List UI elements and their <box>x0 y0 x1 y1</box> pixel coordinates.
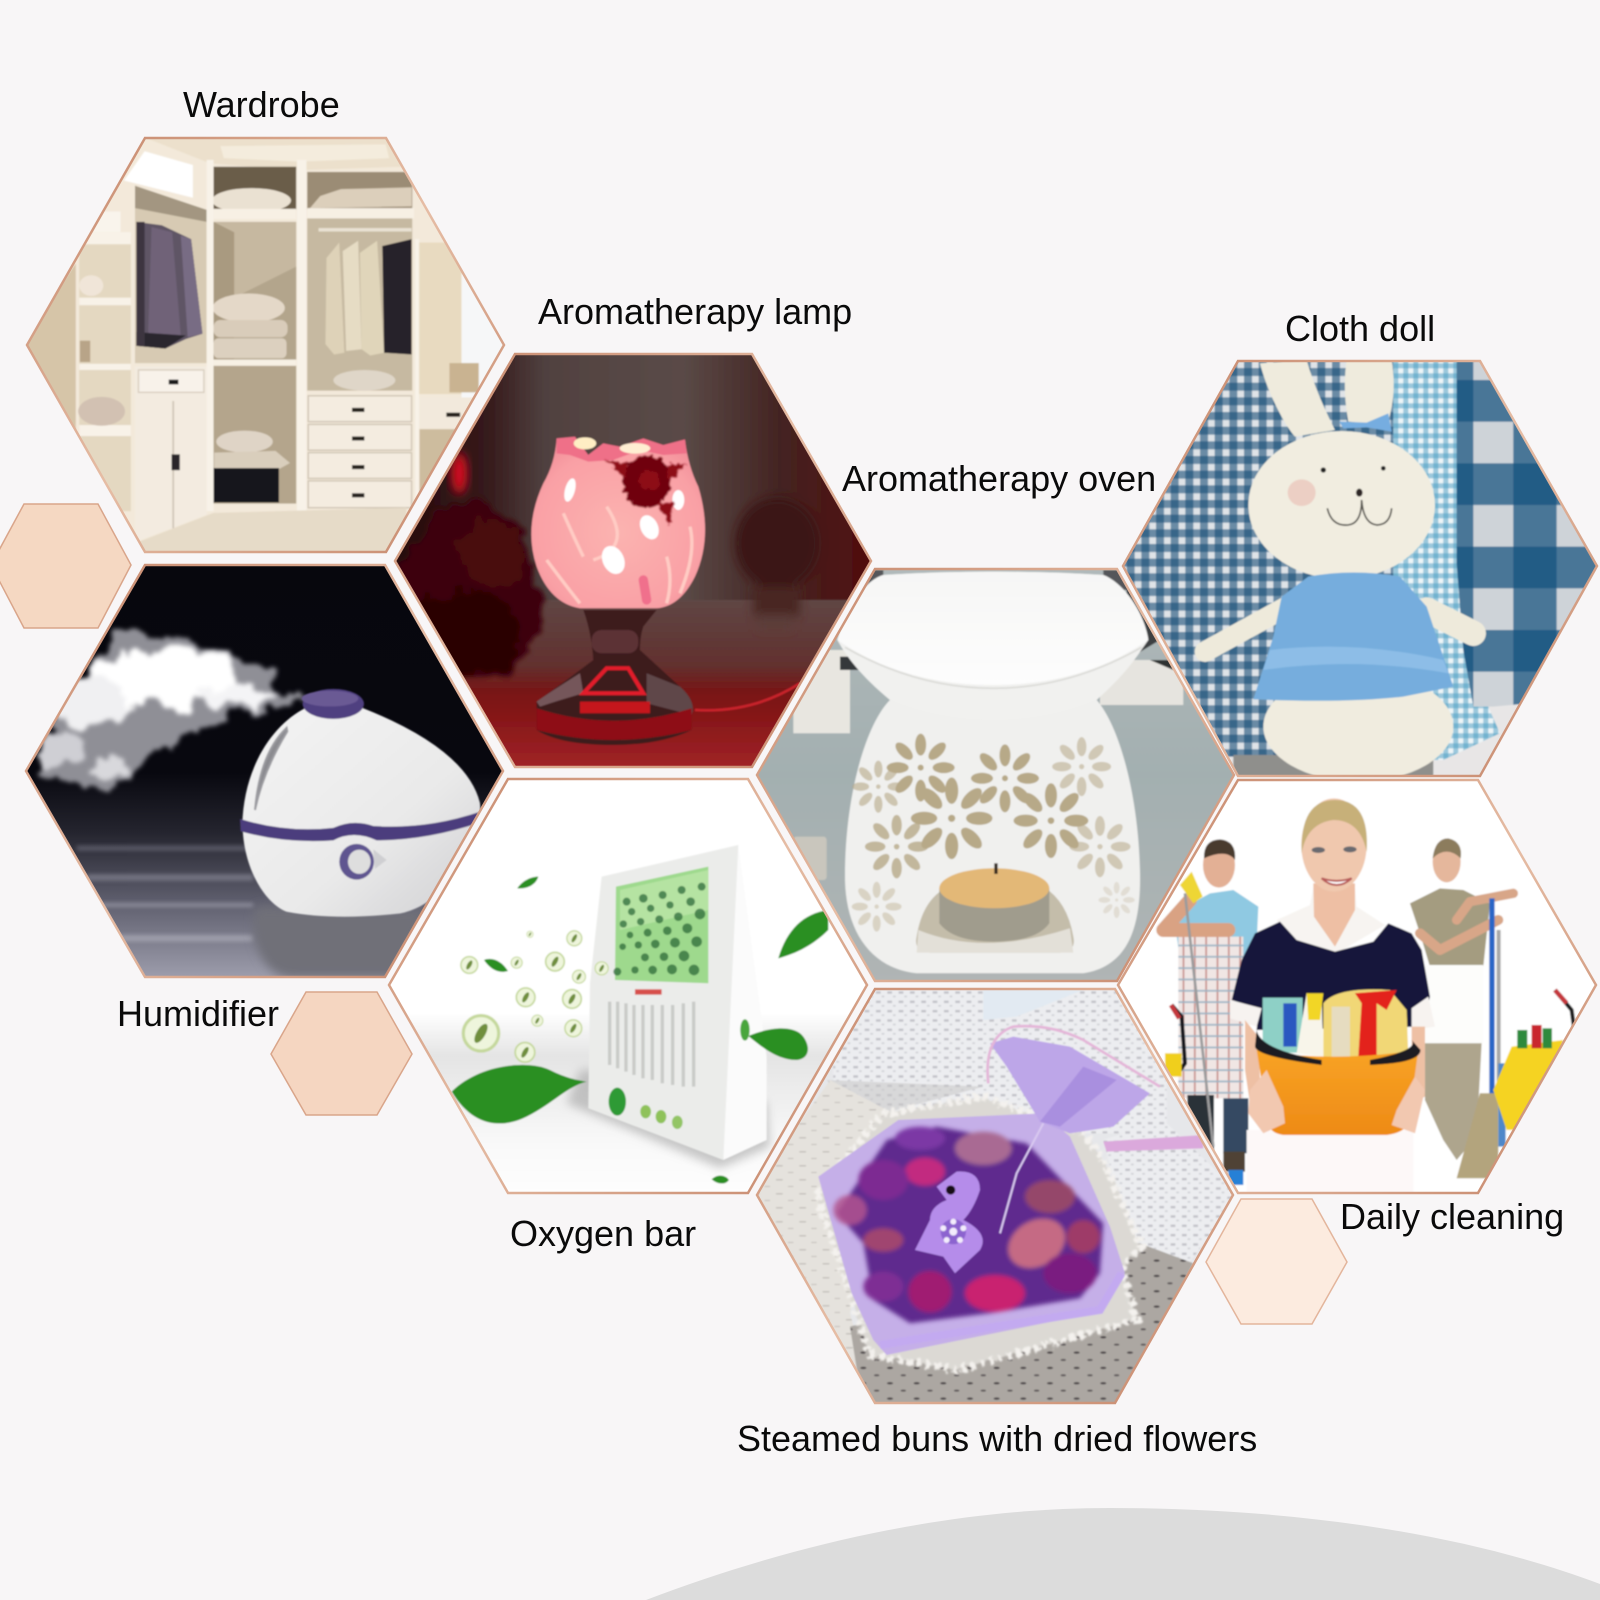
bunny face <box>1321 467 1326 473</box>
label: Daily cleaning: Daily cleaning <box>1340 1196 1564 1237</box>
small peach hexagon: left <box>0 504 131 628</box>
oil dish <box>836 570 1150 701</box>
decorative grey arc at bottom <box>646 1508 1600 1600</box>
label: Oxygen bar: Oxygen bar <box>510 1213 696 1254</box>
hexagon outline: cloth doll <box>1123 361 1597 776</box>
red bokeh <box>451 453 467 494</box>
purple flamingo charm <box>915 1172 983 1273</box>
label: Aromatherapy lamp: Aromatherapy lamp <box>538 291 852 332</box>
lamp shade <box>531 437 705 608</box>
posts <box>207 160 214 511</box>
rose ornament <box>605 456 688 525</box>
lace cushion <box>817 1097 1142 1370</box>
hexagon outline: daily cleaning <box>1118 780 1596 1193</box>
hexagon outline: wardrobe <box>27 138 504 552</box>
cleaning supplies <box>1263 989 1408 1057</box>
right column <box>297 160 307 511</box>
orange basket <box>1255 1030 1421 1135</box>
hexagon outline: sachet <box>757 989 1233 1403</box>
grille dots <box>613 883 706 976</box>
oxygen bubbles <box>461 931 608 1062</box>
humidifier body <box>240 689 480 917</box>
oxygen device <box>588 845 767 1160</box>
green leaves <box>452 877 828 1184</box>
burner body <box>845 700 1140 973</box>
panel: daily cleaning <box>1110 770 1600 1210</box>
organza bag <box>818 1026 1203 1355</box>
rolled paper <box>827 990 1240 1267</box>
woman in navy <box>1230 798 1435 1207</box>
blurred roses <box>398 503 542 683</box>
panel: steamed buns with dried flowers <box>750 980 1240 1410</box>
blurred silhouette <box>735 498 818 630</box>
hexagon outline: oxygen bar <box>389 779 867 1193</box>
bunny <box>1205 360 1473 782</box>
panel: cloth doll <box>1110 350 1600 782</box>
vent slots <box>608 1002 695 1087</box>
holding hands <box>1248 1070 1425 1133</box>
lamp base <box>537 610 800 745</box>
floor streaks <box>77 846 253 941</box>
panel: wardrobe <box>28 139 480 551</box>
device shadow <box>567 1070 770 1168</box>
reflection <box>250 909 413 976</box>
dark gingham pillow <box>1110 360 1397 757</box>
panel: humidifier <box>20 560 513 985</box>
hexagon outline: aromatherapy oven <box>757 569 1234 981</box>
label: Aromatherapy oven: Aromatherapy oven <box>842 458 1156 499</box>
panel: oxygen bar <box>391 780 865 1184</box>
hanging dark clothes <box>135 186 207 363</box>
yellow bucket <box>1493 990 1574 1130</box>
floor <box>140 508 406 551</box>
bunny dress <box>1253 572 1453 701</box>
small peach hexagon: right <box>1206 1199 1347 1324</box>
woman in khaki <box>1410 838 1513 1178</box>
linen cloth left <box>750 1080 893 1410</box>
large check pillow <box>1457 360 1600 707</box>
dried petals <box>833 1127 1103 1323</box>
controls <box>609 1088 626 1116</box>
panel: aromatherapy lamp <box>390 350 877 773</box>
label: Humidifier: Humidifier <box>117 993 279 1034</box>
label: Steamed buns with dried flowers: Steamed buns with dried flowers <box>737 1418 1257 1459</box>
white furniture <box>793 570 1183 733</box>
crown moulding <box>151 140 400 170</box>
far left cabinet <box>28 264 76 428</box>
hexagon outline: humidifier <box>26 565 503 977</box>
label: Cloth doll: Cloth doll <box>1285 308 1435 349</box>
cut-out flowers <box>852 734 1135 932</box>
right drawers <box>308 396 412 508</box>
man with apron <box>1163 839 1258 1185</box>
tealight candle <box>939 863 1049 942</box>
left shelves <box>78 212 131 511</box>
grey tablecloth <box>850 1243 1193 1410</box>
centre column <box>212 167 296 504</box>
panel: aromatherapy oven <box>750 560 1240 990</box>
small peach hexagon: middle <box>271 992 412 1115</box>
cabinet door and drawer <box>138 369 205 528</box>
hexagon outline: aromatherapy lamp <box>395 354 871 767</box>
mist plume <box>32 630 300 787</box>
far right shelf <box>415 239 502 498</box>
label: Wardrobe: Wardrobe <box>183 84 340 125</box>
light gingham pillow <box>1393 360 1500 760</box>
